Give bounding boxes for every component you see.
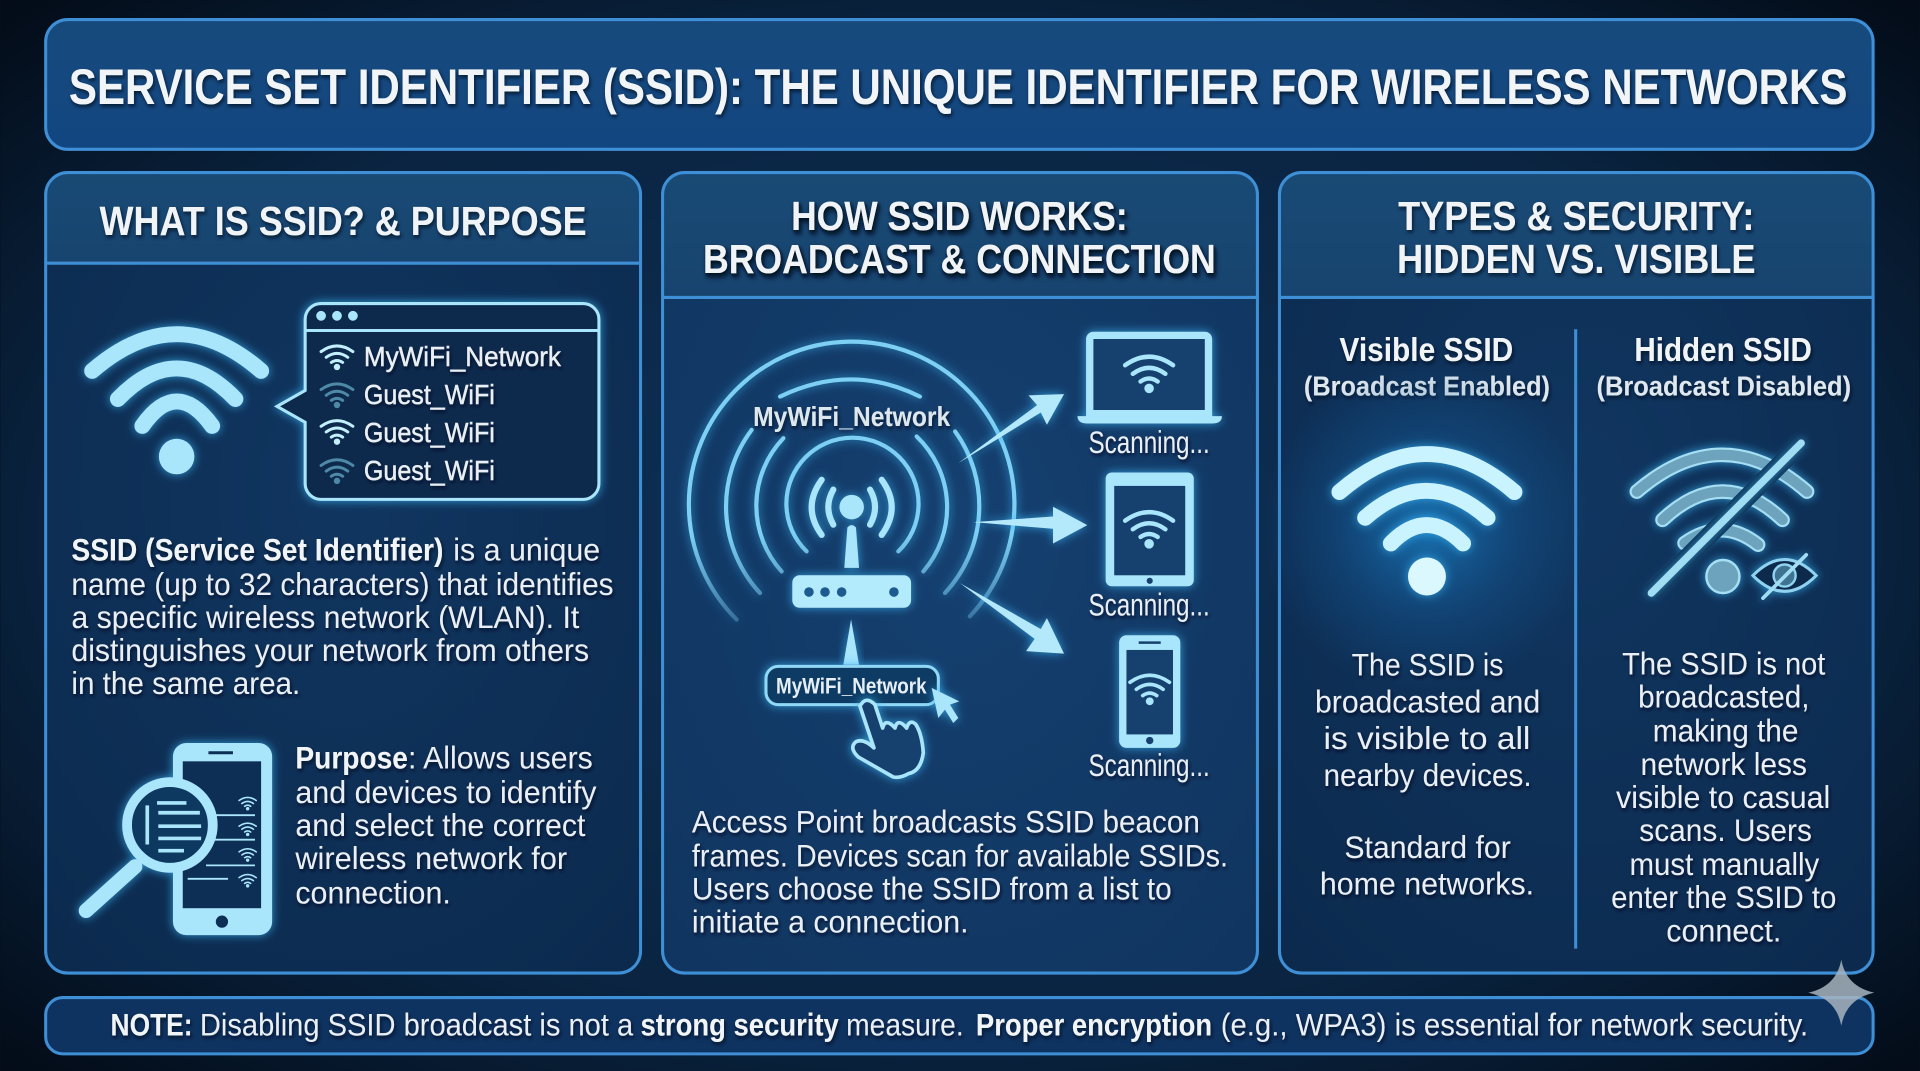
visible heading: Visible SSID [1339,332,1513,369]
icon: phone with magnifier [86,743,272,935]
hidden heading: (Broadcast Disabled) [1596,370,1851,401]
how it works text: frames. Devices scan for available SSIDs. [692,838,1228,874]
visible heading: (Broadcast Enabled) [1304,370,1550,401]
list wifi icons [321,346,353,484]
column: hidden SSID [1596,332,1851,948]
SSID selection illustration: MyWiFi_Network [776,673,927,698]
scanning label: Scanning... [1089,424,1210,460]
hidden description: enter the SSID to [1611,879,1836,915]
network list window [277,304,599,499]
list network names [364,341,562,486]
visible description: Standard for [1344,829,1511,865]
icon: sparkle watermark [1808,960,1874,1026]
note text: (e.g., WPA3) is essential for network security. [1221,1007,1808,1043]
SSID definition text: a specific wireless network (WLAN). It [71,599,579,635]
icon: router with antenna [792,480,911,608]
panel: types and security [1261,173,1873,973]
broadcast signal arcs [689,342,1014,620]
visible heading [1304,332,1550,401]
visible description: home networks. [1320,866,1534,902]
icon: visible wifi [1339,454,1514,595]
panel: what is SSID and purpose [46,173,641,973]
note text: NOTE: [111,1007,193,1043]
how it works text [692,803,1228,940]
icon: smartphone [1119,635,1180,748]
note text: measure. [846,1007,964,1043]
purpose text: connection. [295,874,451,910]
list network names: Guest_WiFi [364,379,495,410]
hidden description: must manually [1630,846,1819,882]
visible description [1315,647,1540,902]
panel heading [1397,193,1756,282]
panel heading: WHAT IS SSID? & PURPOSE [100,198,587,244]
icon: tablet [1106,472,1194,586]
note text [111,1007,1808,1043]
list network names: Guest_WiFi [364,455,495,486]
panel heading: BROADCAST & CONNECTION [703,236,1216,282]
icon: hidden wifi with slash and eye [1637,443,1816,598]
panel heading: HIDDEN VS. VISIBLE [1397,236,1756,282]
note text: strong security [641,1007,839,1043]
hidden heading [1596,332,1851,401]
SSID definition text: in the same area. [71,665,300,701]
panel: how SSID works [663,173,1257,973]
hidden description: scans. Users [1639,812,1812,848]
purpose text: and devices to identify [295,774,597,810]
purpose text: and select the correct [295,807,586,843]
scanning label: Scanning... [1089,747,1210,783]
hidden heading: Hidden SSID [1634,332,1812,369]
network name label: MyWiFi_Network [753,401,951,432]
hidden description [1611,645,1836,948]
scanning label: Scanning... [1089,587,1210,623]
list network names: Guest_WiFi [364,417,495,448]
purpose text: wireless network for [294,840,567,876]
how it works text: initiate a connection. [692,904,969,940]
SSID definition text: name (up to 32 characters) that identifies [71,566,614,602]
visible description: is visible to all [1324,720,1530,756]
title banner [46,20,1873,149]
list network names: MyWiFi_Network [364,341,562,372]
visible description: The SSID is [1352,647,1503,683]
column: visible SSID [1261,332,1592,902]
panel heading: HOW SSID WORKS: [791,193,1128,239]
hidden description: The SSID is not [1622,645,1826,681]
how it works text: Users choose the SSID from a list to [692,871,1172,907]
hidden description: visible to casual [1616,779,1830,815]
icon: large wifi [92,334,261,474]
SSID definition text: SSID (Service Set Identifier) [71,532,443,568]
hidden description: connect. [1666,912,1781,948]
hidden description: making the [1653,713,1798,749]
SSID selection illustration [766,619,959,777]
visible description: broadcasted and [1315,683,1540,719]
hidden description: network less [1641,746,1807,782]
panel heading [703,193,1216,282]
arrows to devices [958,394,1087,654]
hidden description: broadcasted, [1638,678,1809,714]
purpose text: Purpose: Allows users [295,740,593,776]
visible description: nearby devices. [1324,757,1532,793]
how it works text: Access Point broadcasts SSID beacon [692,803,1200,839]
note text: Disabling SSID broadcast is not a [200,1007,633,1043]
SSID definition text: distinguishes your network from others [71,632,589,668]
note bar [46,998,1873,1054]
icon: laptop [1078,335,1222,424]
SSID definition text [71,532,614,701]
panel heading: TYPES & SECURITY: [1398,193,1754,239]
SSID definition text: is a unique [453,532,600,568]
note text: Proper encryption [976,1007,1212,1043]
purpose text [294,740,597,910]
